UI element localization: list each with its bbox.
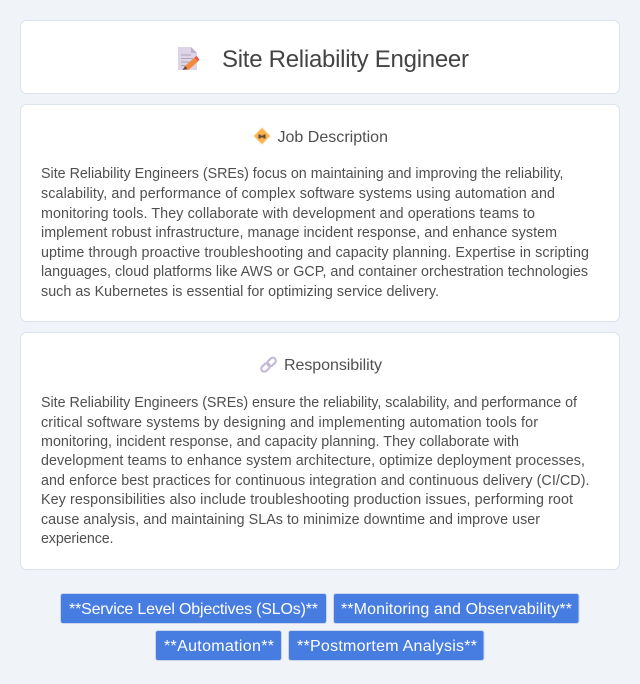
tag: postmortem analysis: **Postmortem Analysis**: [297, 638, 477, 655]
heading: responsibility: Responsibility: [284, 357, 382, 374]
tag: monitoring and observability: **Monitoring and Observability**: [341, 601, 572, 618]
text block: job description: implement robust infrastructure, manage incident response, and enhance system: [41, 225, 557, 241]
text block: job description: uptime through proactive troubleshooting and capacity planning. Expertise in scripting: [41, 245, 589, 261]
tag: service level objectives: [60, 594, 326, 624]
text block: responsibility: Site Reliability Engineers (SREs) ensure the reliability, scalability, and performance of: [41, 395, 577, 411]
text block: job description: monitoring tools. They collaborate with development and operations teams to: [41, 206, 535, 222]
icon: chain link: [260, 356, 277, 373]
icon: memo with pencil: [178, 47, 199, 70]
tag: postmortem analysis: [288, 630, 484, 660]
text block: responsibility: and enforce best practices for continuous integration and continuous delivery (CI/CD).: [41, 473, 590, 489]
text block: responsibility: Key responsibilities also include troubleshooting production issues, performing root: [41, 492, 573, 508]
text block: job description: [41, 166, 589, 300]
text block: responsibility: critical software systems by designing and implementing automation tools for: [41, 415, 538, 431]
panel: responsibility: [20, 332, 620, 570]
text block: job description: Site Reliability Engineers (SREs) focus on maintaining and improving the reliability,: [41, 166, 564, 182]
text block: job description: languages, cloud platforms like AWS or GCP, and container orchestration technologies: [41, 264, 588, 280]
heading: job description: Job Description: [278, 129, 388, 146]
panel: title: [20, 20, 620, 94]
tag: monitoring and observability: [334, 594, 579, 624]
icon: diamond sign: [254, 128, 270, 144]
tag: service level objectives: **Service Level Objectives (SLOs)**: [69, 601, 318, 618]
tag: automation: **Automation**: [164, 638, 274, 655]
text block: responsibility: monitoring, incident response, and capacity planning. They collaborate with: [41, 434, 519, 450]
text block: responsibility: experience.: [41, 531, 114, 547]
text block: responsibility: cause analysis, and maintaining SLAs to minimize downtime and improve user: [41, 512, 540, 528]
text block: responsibility: [41, 395, 590, 547]
text block: responsibility: development teams to enhance system architecture, optimize deployment processes,: [41, 453, 585, 469]
tag: automation: [156, 630, 282, 660]
text block: job description: such as Kubernetes is essential for optimizing service delivery.: [41, 284, 439, 300]
text block: job description: scalability, and performance of complex software systems using automation and: [41, 186, 555, 202]
title text: Site Reliability Engineer: [222, 46, 469, 73]
panel: job description: [20, 104, 620, 322]
